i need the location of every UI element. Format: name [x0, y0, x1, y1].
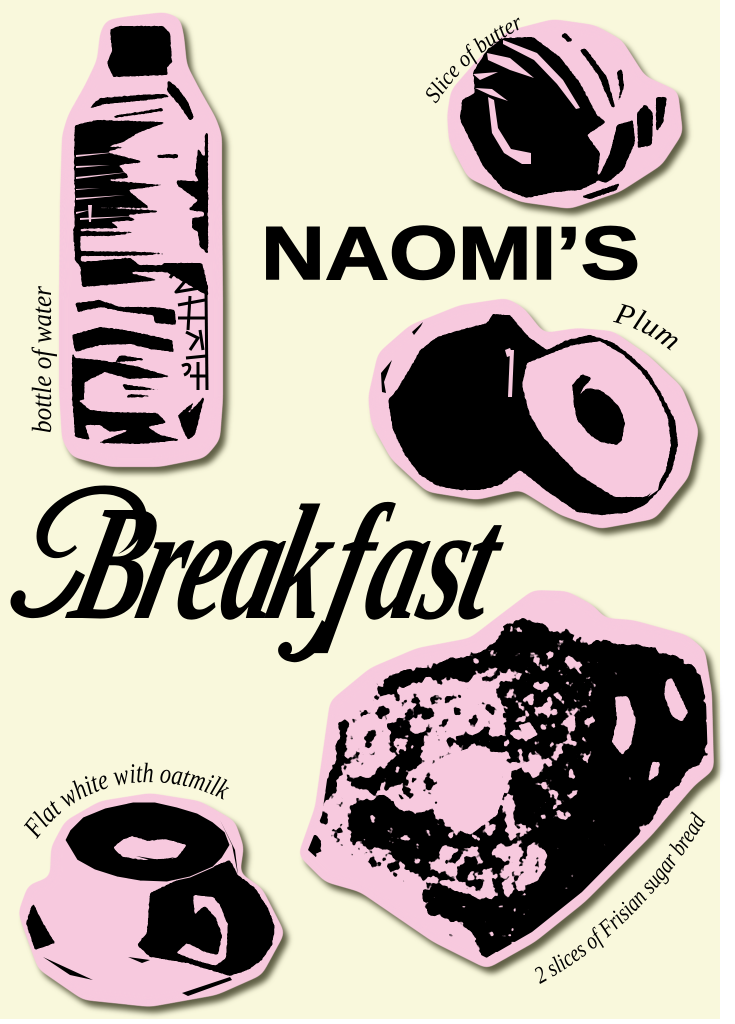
- plum dark skin: [388, 314, 678, 515]
- cup shadow and saucer: [137, 860, 275, 976]
- sticker: flat white coffee: [18, 793, 285, 1007]
- bread dark texture: [305, 620, 710, 958]
- caption: flat white with oatmilk: Flat white with oatmilk: [24, 762, 230, 839]
- decorative swashes of the capital B: [37, 485, 147, 558]
- title: NAOMI'S: NAOMI’S: [261, 211, 640, 295]
- sticker: bottle of water: [59, 12, 223, 467]
- heading: Breakfast: Breakfast: [56, 471, 522, 654]
- bottle thin highlights: [76, 152, 135, 222]
- sticker: plum: [368, 298, 699, 529]
- coffee backing: [18, 793, 285, 1007]
- sticker: Frisian sugar bread: [298, 590, 714, 969]
- upper middle: [500, 650, 600, 770]
- caption: plum: Plum: [613, 304, 678, 350]
- butter backing: [447, 19, 683, 209]
- cup handle: [176, 895, 228, 966]
- coffee surface: [65, 802, 230, 882]
- lower left: [350, 795, 450, 878]
- plum cut flesh: [522, 341, 671, 497]
- caption: 2 slices of Frisian sugar bread: 2 slices of Frisian sugar bread: [534, 811, 706, 984]
- left edge: [314, 718, 348, 825]
- right mass: [520, 640, 710, 925]
- caption: bottle of water: bottle of water: [27, 286, 57, 433]
- butter artwork: [460, 33, 667, 199]
- bottle artwork: [72, 26, 208, 444]
- plum backing: [368, 298, 699, 529]
- plum artwork: [381, 314, 678, 515]
- sparse base: [318, 640, 600, 940]
- diagonal streak: [360, 735, 425, 795]
- bottle backing: [59, 12, 223, 467]
- caption: slice of butter: Slice of butter: [426, 18, 520, 104]
- sticker: slice of butter: [447, 19, 683, 209]
- saucer shading: [26, 903, 55, 950]
- butter slits and highlight: [473, 40, 580, 164]
- descending f flourish: [278, 620, 333, 662]
- bottom arc: [422, 880, 545, 958]
- plum pit: [573, 388, 625, 445]
- plum rim sliver: [648, 480, 660, 497]
- bread crumb highlights: [438, 678, 688, 835]
- milk heart: [113, 836, 187, 860]
- bread backing: [298, 590, 714, 969]
- bottle label squiggles: [170, 273, 207, 390]
- top band: [372, 620, 590, 697]
- mid solid patch: [512, 775, 535, 815]
- cup artwork: [26, 802, 275, 996]
